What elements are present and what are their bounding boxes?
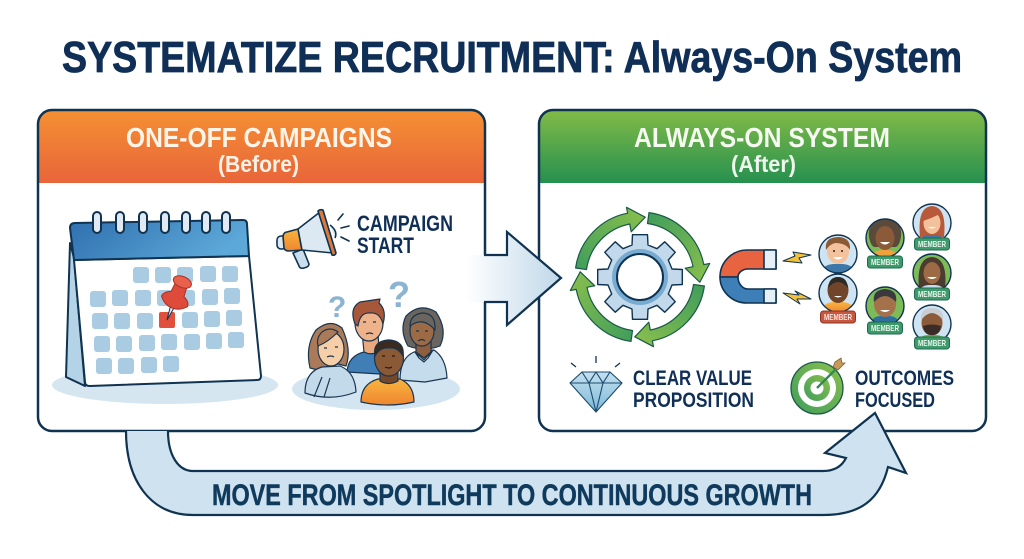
label: campaign start: [357, 211, 453, 258]
member avatar 7: MEMBER: [918, 338, 946, 348]
icon: magnet with sparks: [720, 250, 811, 304]
person: man at back: [347, 299, 402, 374]
question marks: ?: [388, 274, 410, 315]
label: campaign start: CAMPAIGN: [357, 211, 453, 236]
panel header: one-off campaigns: ONE-OFF CAMPAIGNS: [126, 122, 392, 153]
label: clear value proposition: PROPOSITION: [633, 389, 754, 412]
person: woman right: [400, 308, 447, 382]
panel: one-off campaigns (before): [38, 110, 485, 431]
panel header: one-off campaigns: (Before): [218, 151, 299, 177]
panel header: always-on system: [539, 110, 986, 183]
panel header: one-off campaigns: [38, 110, 485, 183]
icon: target with arrow: [791, 358, 845, 414]
member avatar 2 with red label: [819, 274, 857, 323]
arrow: curved banner with growth message: [126, 413, 906, 515]
member avatar 5: MEMBER: [918, 239, 946, 249]
member avatar 3: [866, 218, 904, 268]
arrow: before to after: [466, 232, 561, 325]
person: woman left: [305, 323, 356, 397]
member avatar 7: [913, 305, 951, 349]
label: clear value proposition: [633, 367, 754, 412]
member avatar 6: [913, 254, 951, 300]
member avatar 4: [866, 287, 904, 334]
avatars: members: [819, 204, 951, 349]
question marks: [328, 274, 410, 324]
member avatar 3: MEMBER: [871, 257, 899, 267]
icon: desk calendar with pin: [52, 212, 278, 404]
member avatar 6: MEMBER: [918, 289, 946, 299]
label: campaign start: START: [357, 233, 414, 258]
panel header: always-on system: ALWAYS-ON SYSTEM: [634, 122, 890, 153]
panel: always-on system (after): [539, 110, 986, 431]
icon: diamond: [570, 356, 622, 412]
icon: megaphone: [277, 210, 349, 268]
member avatar 2 with red label: MEMBER: [824, 312, 852, 322]
label: outcomes focused: FOCUSED: [855, 389, 935, 412]
banner text: MOVE FROM SPOTLIGHT TO CONTINUOUS GROWTH: [212, 479, 812, 512]
member avatar 4: MEMBER: [871, 323, 899, 333]
question marks: ?: [328, 291, 346, 324]
member avatar 1: [819, 235, 857, 274]
panel header: always-on system: (After): [731, 151, 796, 177]
member avatar 5: [913, 204, 951, 250]
illustration: confused group of people: [292, 274, 460, 410]
label: outcomes focused: [855, 367, 954, 412]
person: man in front: [361, 340, 414, 405]
label: clear value proposition: CLEAR VALUE: [633, 367, 752, 390]
icon: gear with cycle arrows: [570, 207, 710, 347]
label: outcomes focused: OUTCOMES: [855, 367, 954, 390]
